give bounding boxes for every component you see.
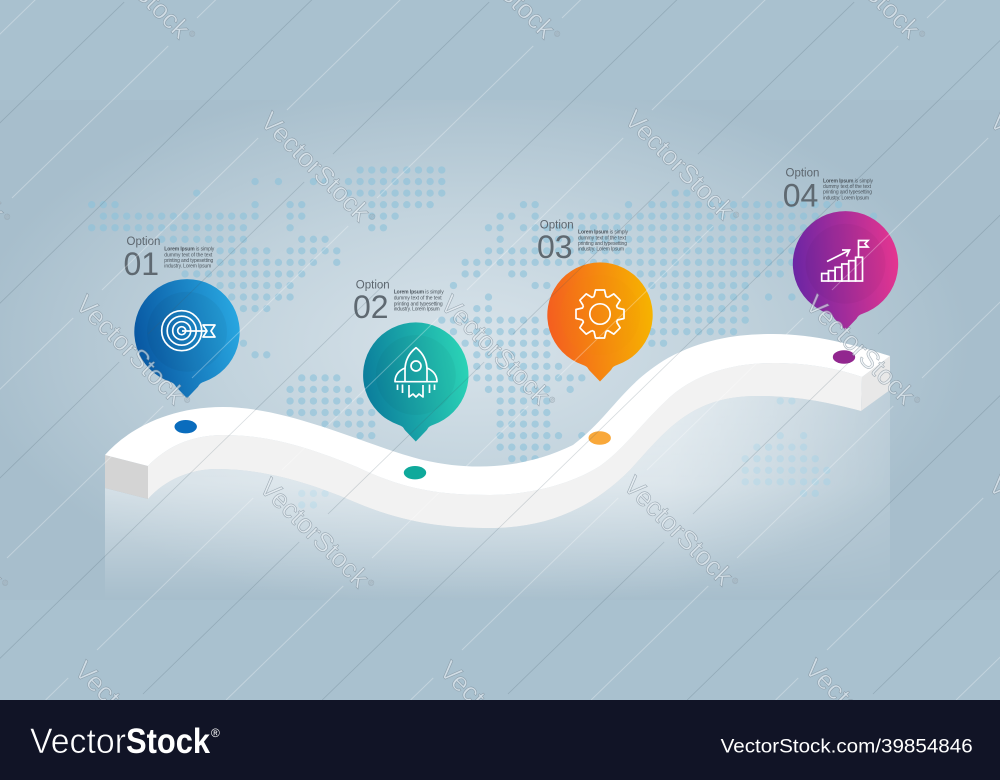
watermarks: ® — [730, 576, 740, 586]
watermarks: ® — [911, 759, 921, 769]
footer logo — [30, 722, 220, 761]
road marker 3 — [588, 431, 611, 445]
option 01 pin — [134, 279, 240, 398]
watermarks: ® — [912, 395, 922, 405]
option 03 label: Option — [540, 219, 574, 231]
option 03 pin — [547, 262, 653, 382]
watermarks: ® — [182, 395, 192, 405]
option 04 description: industry. Lorem Ipsum — [823, 195, 869, 201]
watermarks: VectorStock — [618, 470, 739, 591]
option 03 description: printing and typesetting — [578, 241, 627, 247]
watermarks: VectorStock — [619, 104, 740, 225]
option 03 description: Lorem Ipsum is simply — [578, 229, 628, 235]
option 01 description: dummy text of the text — [164, 252, 213, 258]
option 02 description: Lorem Ipsum is simply — [394, 290, 444, 296]
option 01 number: 01 — [124, 246, 159, 282]
option 04 description: printing and typesetting — [823, 190, 872, 196]
road marker 1 — [174, 420, 197, 433]
road top surface — [105, 334, 890, 495]
icon: target with arrow — [162, 311, 215, 351]
option 02 description — [394, 290, 444, 313]
watermarks: ® — [181, 761, 191, 771]
footer image id: VectorStock.com/39854846 — [721, 737, 973, 758]
curved 3D road — [105, 334, 890, 528]
watermarks: VectorStock — [799, 653, 920, 774]
road front face — [148, 363, 862, 528]
option 01 — [124, 236, 240, 398]
watermarks: ® — [366, 578, 376, 588]
option 04 — [783, 168, 898, 330]
option 04 description — [823, 178, 874, 201]
option 01 description: Lorem Ipsum is simply — [164, 247, 215, 253]
watermarks: ® — [367, 212, 377, 222]
watermarks: VectorStock — [255, 106, 376, 227]
watermarks: ® — [917, 29, 927, 39]
icon: rocket — [395, 348, 437, 397]
option 03 description: industry. Lorem Ipsum — [578, 247, 624, 253]
option 03 description — [578, 229, 628, 253]
watermarks: VectorStock — [800, 289, 921, 410]
option 02 description: printing and typesetting — [394, 301, 443, 307]
footer logo: ® — [211, 726, 220, 740]
option 03 description: dummy text of the text — [578, 235, 627, 241]
option 04 description: dummy text of the text — [823, 184, 872, 190]
option 02 — [353, 279, 468, 442]
watermarks: ® — [547, 395, 557, 405]
dotted world map — [92, 170, 874, 505]
watermarks: VectorStock — [70, 289, 191, 410]
option 04 number: 04 — [783, 178, 818, 214]
icon: growth chart with flag — [822, 240, 868, 281]
watermarks: VectorStock — [435, 289, 556, 410]
option 01 description: printing and typesetting — [164, 258, 214, 264]
option 01 label: Option — [126, 236, 160, 248]
watermarks: ® — [0, 578, 10, 588]
option 04 pin — [793, 211, 898, 330]
watermarks: ® — [2, 212, 12, 222]
icon: gear — [576, 290, 624, 338]
footer logo: Stock — [126, 722, 210, 761]
footer bar — [0, 700, 1000, 780]
watermarks: VectorStock — [69, 655, 190, 776]
pedestal under the road — [105, 391, 890, 577]
watermarks: ® — [552, 29, 562, 39]
option 04 label: Option — [786, 168, 819, 180]
option 02 description: dummy text of the text — [394, 296, 442, 302]
road marker 4 — [833, 350, 855, 364]
option 02 pin — [363, 322, 468, 442]
road left end face — [105, 455, 148, 499]
option 02 description: industry. Lorem Ipsum — [394, 307, 440, 313]
road marker 2 — [404, 466, 426, 479]
watermarks: ® — [187, 29, 197, 39]
watermarks: VectorStock — [254, 472, 375, 593]
option 01 description: industry. Lorem Ipsum — [164, 264, 211, 270]
option 03 — [537, 219, 653, 382]
option 04 description: Lorem Ipsum is simply — [823, 178, 874, 184]
watermarks: VectorStock — [434, 655, 555, 776]
option 03 number: 03 — [537, 229, 573, 265]
option 01 description — [164, 247, 215, 270]
option 02 label: Option — [356, 279, 390, 291]
road right end face — [861, 356, 890, 411]
watermarks: ® — [731, 210, 741, 220]
footer logo: Vector — [30, 722, 126, 761]
watermarks: ® — [546, 761, 556, 771]
option 02 number: 02 — [353, 289, 389, 325]
